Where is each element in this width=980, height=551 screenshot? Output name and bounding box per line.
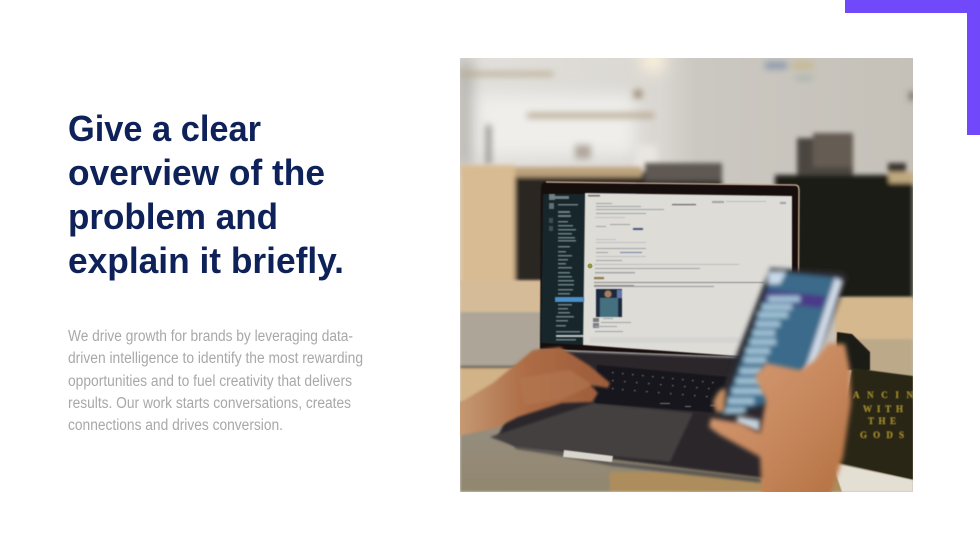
- keyboard: [595, 365, 727, 413]
- body text block: connections and drives conversion.: [68, 417, 283, 434]
- title: explain it briefly.: [68, 240, 344, 281]
- book with yellow lettering: [832, 332, 914, 492]
- screen sidebar: [541, 194, 585, 345]
- phone edge highlights: [798, 278, 842, 396]
- book with yellow lettering: GODS: [860, 430, 904, 440]
- title: problem and: [68, 196, 278, 237]
- book with yellow lettering: THE: [868, 416, 896, 426]
- phone: [716, 268, 847, 432]
- sidebar highlighted row: [555, 297, 584, 302]
- laptop front edge: [514, 444, 762, 483]
- body text block: [68, 328, 363, 434]
- right hand finger: [713, 389, 726, 412]
- laptop bezel: [540, 182, 799, 359]
- phone header: [764, 290, 826, 308]
- screen main area: [583, 193, 792, 360]
- phone body: [716, 268, 847, 420]
- book with yellow lettering: WITH: [863, 404, 903, 414]
- avatar: [588, 264, 592, 268]
- phone list rows: [725, 296, 800, 413]
- laptop: [490, 182, 800, 483]
- title: Give a clear: [68, 108, 261, 149]
- wooden table: [460, 280, 913, 492]
- chat image thumbnail: [596, 289, 622, 317]
- corner accent: purple bracket: [845, 0, 980, 135]
- left hand on keyboard: [458, 347, 610, 436]
- photo: hands using a laptop and a phone: [460, 58, 913, 492]
- book with yellow lettering: ANCIN: [853, 390, 913, 400]
- title: [68, 108, 344, 281]
- silver notch: [563, 450, 613, 462]
- right hand holding phone: [709, 343, 851, 496]
- blurred cafe background: [460, 48, 914, 492]
- chat message lines: [588, 195, 786, 343]
- sidebar rows: [549, 194, 584, 340]
- trackpad: [490, 403, 693, 462]
- title: overview of the: [68, 152, 325, 193]
- laptop deck: [498, 350, 800, 480]
- phone screen: [722, 272, 838, 414]
